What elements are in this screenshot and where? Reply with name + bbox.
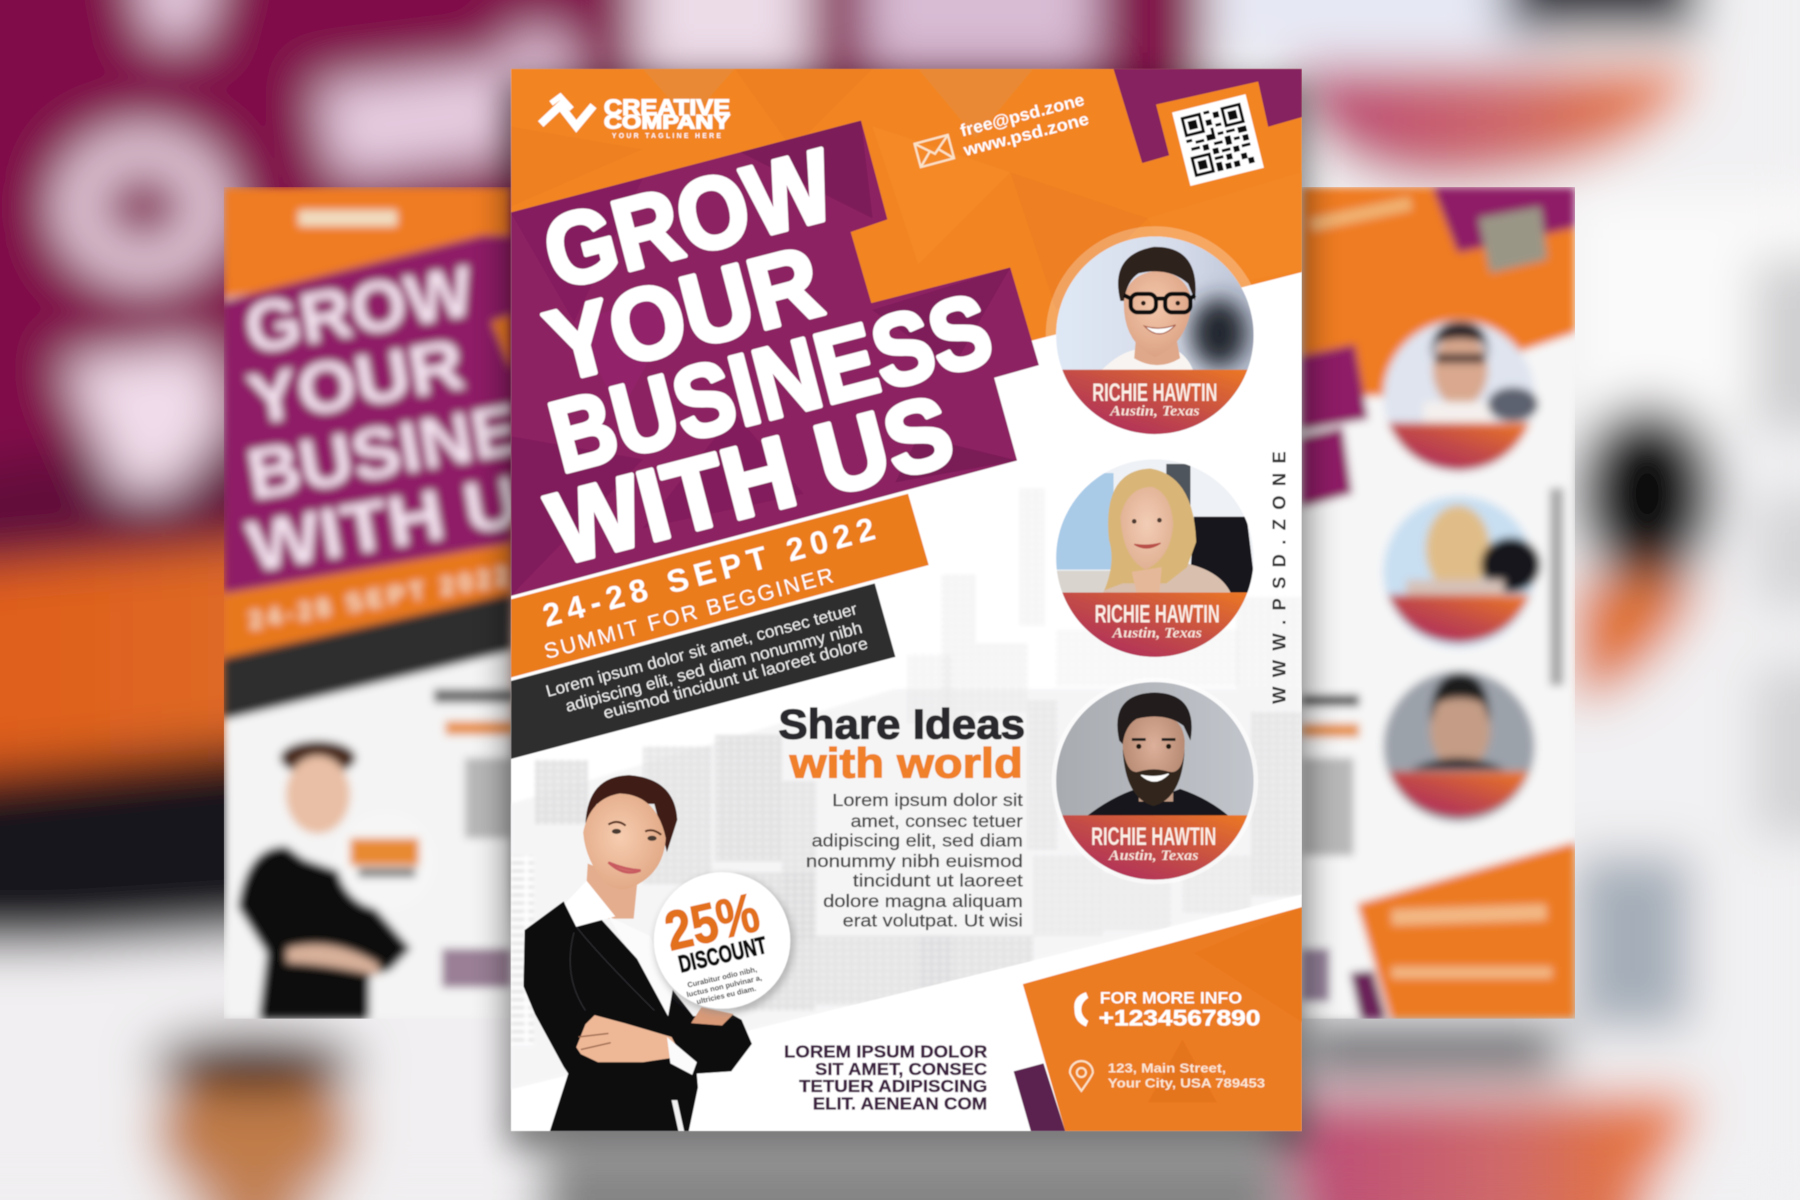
- uppercase tagline: SIT AMET, CONSEC: [815, 1059, 987, 1079]
- shirt collar: [565, 881, 615, 927]
- upper hand: [691, 1007, 734, 1025]
- QR code: [1172, 94, 1264, 186]
- purple footer accent: [1014, 1063, 1065, 1131]
- dark text band: euismod tincidunt ut laoreet dolore: [601, 634, 870, 723]
- share ideas body text: erat volutpat. Ut wisi: [843, 911, 1023, 931]
- right back flyer (out of focus): [1302, 187, 1575, 1019]
- contact email and web: free@psd.zone: [958, 89, 1086, 141]
- company logo: [541, 95, 730, 140]
- portrait location: Austin, Texas: [1109, 404, 1200, 420]
- company logo: COMPANY: [604, 112, 730, 134]
- portrait location: Austin, Texas: [1111, 625, 1202, 641]
- blazer: [523, 901, 752, 1131]
- QR orange frame: [1156, 81, 1269, 156]
- left flyer headline: GROW: [239, 252, 480, 369]
- share ideas heading: [778, 701, 1025, 786]
- discount badge: [654, 872, 794, 1014]
- lower hand: [576, 1015, 682, 1062]
- icon: phone: [1074, 992, 1088, 1027]
- icon: envelope: [915, 135, 954, 167]
- orange date band: [511, 494, 929, 678]
- left flyer headline: [239, 252, 527, 588]
- lapel crease: [570, 927, 654, 1011]
- uppercase tagline: TETUER ADIPISCING: [799, 1076, 987, 1096]
- share ideas body text: Lorem ipsum dolor sit: [832, 790, 1023, 810]
- dark text band: [511, 583, 895, 759]
- headline text: YOUR: [535, 226, 832, 404]
- uppercase tagline: ELIT. AENEAN COM: [813, 1093, 987, 1113]
- share ideas body text: dolore magna aliquam: [823, 891, 1023, 911]
- headline text: GROW: [533, 129, 845, 311]
- portrait: blonde woman: [1050, 459, 1257, 661]
- share ideas body text: adipiscing elit, sed diam: [812, 830, 1023, 850]
- date: 24-28 SEPT 2022: [539, 510, 879, 634]
- share ideas body text: nonummy nibh euismod: [806, 851, 1023, 871]
- contact label: FOR MORE INFO: [1100, 989, 1242, 1008]
- logo mark: [541, 96, 593, 126]
- city skyline backdrop: [511, 488, 1302, 1090]
- discount small print: ultricies eu diam.: [696, 984, 757, 1006]
- discount small print: [684, 964, 765, 1008]
- purple headline panel: [511, 121, 1039, 596]
- hair: [585, 775, 677, 852]
- left flyer headline: YOUR: [242, 325, 470, 441]
- portrait name: RICHIE HAWTIN: [1092, 379, 1217, 407]
- discount small print: Curabitur odio nibh,: [686, 965, 758, 990]
- address: 123, Main Street,: [1108, 1062, 1226, 1076]
- address: [1108, 1062, 1265, 1090]
- logo wordmark: CREATIVE: [604, 95, 730, 120]
- orange polygon header: [511, 69, 1302, 477]
- skirt gap: [672, 1100, 684, 1131]
- purple QR backing: [1114, 69, 1302, 163]
- headline text: BUSINESS: [539, 273, 1003, 494]
- address: Your City, USA 789453: [1108, 1076, 1265, 1090]
- main flyer: [511, 69, 1302, 1131]
- shirt: [608, 916, 677, 1020]
- uppercase tagline: [784, 1042, 987, 1113]
- left flyer date: 24-28 SEPT 2022: [246, 562, 511, 635]
- contact email and web: www.psd.zone: [960, 108, 1091, 160]
- dark text band: Lorem ipsum dolor sit amet, consec tetuer: [544, 599, 860, 701]
- white diagonal panel: [511, 895, 1302, 1131]
- discount small print: luctus non pulvinar a,: [686, 973, 763, 999]
- portrait name: RICHIE HAWTIN: [1091, 823, 1216, 851]
- uppercase tagline: LOREM IPSUM DOLOR: [784, 1042, 987, 1062]
- right flyer vertical text: [1550, 488, 1564, 686]
- portrait name: RICHIE HAWTIN: [1095, 600, 1220, 628]
- portrait: man with glasses: [1046, 226, 1264, 444]
- businesswoman photo: [523, 775, 752, 1131]
- neck: [587, 864, 637, 919]
- headline text: WITH US: [538, 375, 964, 586]
- discount percent: 25%: [659, 881, 765, 963]
- contact email and web: [959, 96, 1090, 156]
- subtitle: SUMMIT FOR BEGGINER: [541, 563, 836, 664]
- facial features: [608, 822, 661, 835]
- left flyer logo: [298, 210, 397, 226]
- cuff: [667, 1037, 697, 1075]
- left flyer side text: [434, 689, 514, 988]
- left back flyer (out of focus): [224, 187, 527, 1019]
- share ideas heading: Share Ideas: [778, 701, 1025, 747]
- icon: map pin: [1070, 1061, 1093, 1091]
- left flyer headline: WITH U: [242, 462, 527, 588]
- portrait location: Austin, Texas: [1108, 848, 1199, 864]
- right flyer logo text: [1309, 197, 1413, 232]
- phone number: +1234567890: [1099, 1005, 1260, 1030]
- share ideas body text: [806, 790, 1023, 931]
- left flyer headline: BUSINE: [242, 390, 527, 515]
- share ideas heading: with world: [789, 740, 1023, 786]
- right flyer portraits: [1383, 320, 1541, 822]
- portrait: bearded man: [1050, 678, 1258, 884]
- logo tagline: YOUR TAGLINE HERE: [612, 133, 721, 140]
- share ideas body text: tincidunt ut laoreet: [853, 871, 1023, 891]
- left flyer woman: [238, 741, 434, 1019]
- face: [583, 793, 666, 889]
- headline text: [539, 146, 992, 564]
- right flyer side text: [1302, 695, 1359, 706]
- right flyer footer: [1357, 842, 1575, 1019]
- orange contact panel: [1023, 907, 1302, 1131]
- dark text band: adipiscing elit, sed diam nonummy nibh: [563, 618, 864, 716]
- share ideas body text: amet, consec tetuer: [851, 811, 1023, 831]
- vertical website text: WWW.PSD.ZONE: [1269, 451, 1290, 704]
- discount label: DISCOUNT: [676, 932, 770, 978]
- flyer drop shadow: [505, 80, 1309, 1148]
